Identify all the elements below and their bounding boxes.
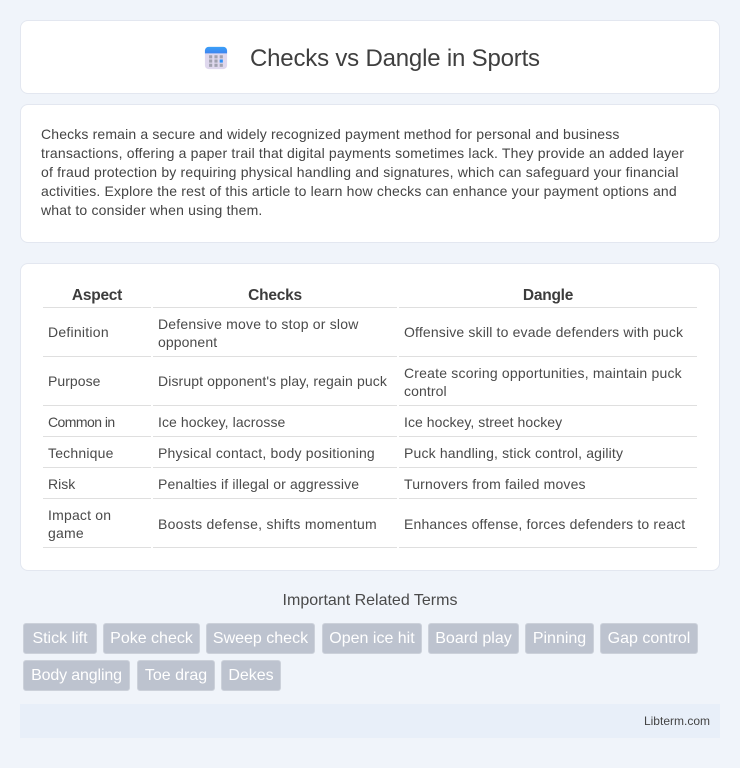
related terms tags: Stick lift bbox=[32, 630, 88, 647]
comparison table: Penalties if illegal or aggressive bbox=[158, 476, 359, 492]
related terms tags: Board play bbox=[435, 630, 512, 647]
comparison table: opponent bbox=[158, 334, 217, 350]
comparison table: Create scoring opportunities, maintain puck bbox=[404, 365, 682, 381]
title: Checks vs Dangle in Sports bbox=[250, 45, 540, 72]
icon: calendar bbox=[204, 46, 228, 70]
intro paragraph: of fraud protection by requiring physical handling and signatures, which can safeguard your financial bbox=[41, 164, 679, 180]
intro paragraph: Checks remain a secure and widely recognized payment method for personal and business bbox=[41, 126, 620, 142]
comparison table: Impact on bbox=[48, 507, 111, 523]
related terms heading: Important Related Terms bbox=[283, 592, 457, 609]
related terms tags: Body angling bbox=[31, 667, 122, 684]
comparison table: Checks bbox=[248, 287, 302, 304]
comparison table: Puck handling, stick control, agility bbox=[404, 445, 623, 461]
comparison table: Enhances offense, forces defenders to react bbox=[404, 516, 685, 532]
related terms tags: Sweep check bbox=[213, 630, 308, 647]
comparison table: game bbox=[48, 525, 84, 541]
comparison table: Technique bbox=[48, 445, 114, 461]
comparison table: Aspect bbox=[72, 287, 122, 304]
footer bar bbox=[20, 704, 720, 738]
comparison table: Offensive skill to evade defenders with puck bbox=[404, 324, 683, 340]
related terms tags bbox=[23, 623, 698, 691]
related terms tags: Toe drag bbox=[145, 667, 207, 684]
comparison table: Turnovers from failed moves bbox=[404, 476, 586, 492]
comparison table: Physical contact, body positioning bbox=[158, 445, 375, 461]
footer credit: Libterm.com bbox=[644, 714, 710, 728]
related terms tags: Pinning bbox=[533, 630, 586, 647]
related terms tags: Gap control bbox=[608, 630, 690, 647]
header panel bbox=[20, 20, 720, 94]
comparison table panel bbox=[20, 263, 720, 571]
intro paragraph: transactions, offering a paper trail that digital payments sometimes lack. They provide an added layer bbox=[41, 145, 684, 161]
comparison table: Disrupt opponent's play, regain puck bbox=[158, 373, 387, 389]
comparison table: Defensive move to stop or slow bbox=[158, 316, 359, 332]
comparison table: Dangle bbox=[523, 287, 573, 304]
intro paragraph: what to consider when using them. bbox=[41, 202, 263, 218]
comparison table: Ice hockey, street hockey bbox=[404, 414, 562, 430]
comparison table: control bbox=[404, 383, 447, 399]
comparison table: Boosts defense, shifts momentum bbox=[158, 516, 377, 532]
comparison table: Purpose bbox=[48, 373, 100, 389]
intro text panel bbox=[20, 104, 720, 243]
related terms tags: Open ice hit bbox=[329, 630, 415, 647]
comparison table bbox=[43, 287, 697, 548]
related terms tags: Dekes bbox=[228, 667, 274, 684]
related terms tags: Poke check bbox=[110, 630, 193, 647]
comparison table: Risk bbox=[48, 476, 75, 492]
intro paragraph: activities. Explore the rest of this article to learn how checks can enhance your payment options and bbox=[41, 183, 677, 199]
intro paragraph bbox=[41, 126, 684, 218]
comparison table: Definition bbox=[48, 324, 109, 340]
comparison table: Ice hockey, lacrosse bbox=[158, 414, 285, 430]
comparison table: Common in bbox=[48, 414, 115, 430]
